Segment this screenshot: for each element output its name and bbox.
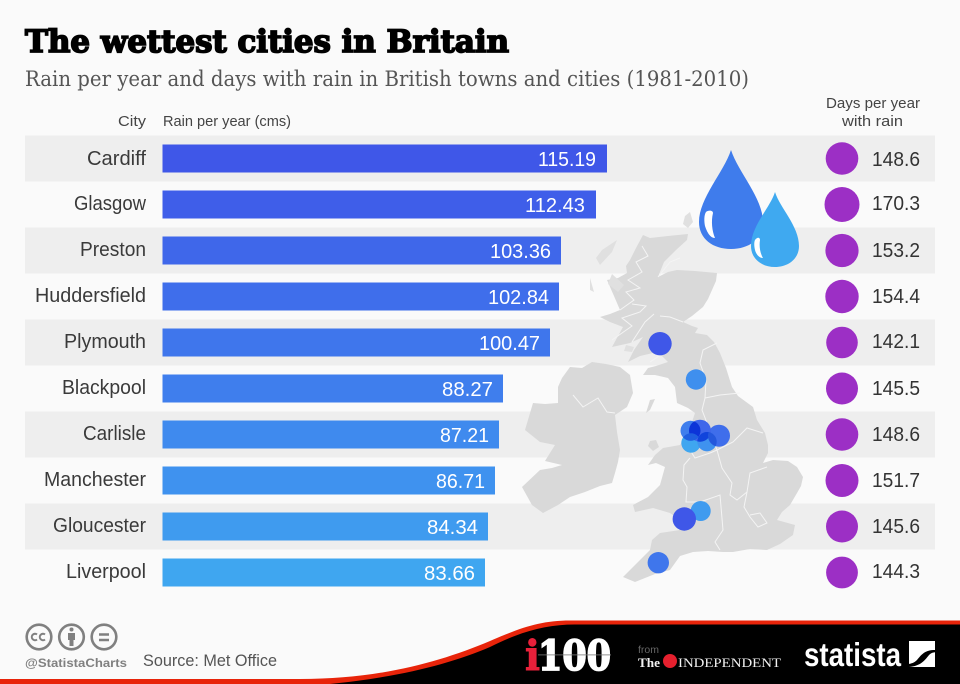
map: Anglesey [648, 440, 659, 451]
statista charts handle: @StatistaCharts [25, 656, 127, 670]
city labels [35, 148, 147, 583]
title: The wettest cities in Britain [25, 24, 509, 60]
city labels: Glasgow [74, 193, 147, 215]
bar: Preston [162, 236, 561, 264]
days values: 148.6 [872, 423, 920, 446]
city labels: Liverpool [66, 561, 146, 583]
bar: Manchester: 86.71 [436, 470, 485, 493]
days values: 153.2 [872, 239, 920, 262]
icon: large rain drop [699, 150, 763, 249]
column headers: Rain per year (cms) [163, 114, 291, 130]
days values: 145.6 [872, 515, 920, 538]
column headers [118, 96, 920, 130]
map city markers [648, 332, 730, 573]
bar: Cardiff: 115.19 [538, 148, 596, 171]
days values [872, 148, 920, 583]
subtitle: Rain per year and days with rain in British towns and cities (1981-2010) [25, 67, 749, 91]
bar: Plymouth: 100.47 [479, 332, 540, 355]
map: Ireland [522, 362, 633, 513]
logo: statista: statista [804, 636, 902, 673]
bar: Plymouth [162, 328, 550, 356]
bubble column: days per year with rain [824, 142, 860, 588]
days values: 170.3 [872, 192, 920, 215]
row bands [25, 136, 935, 550]
bar: Liverpool [162, 558, 485, 586]
bar: Gloucester: 84.34 [427, 516, 478, 539]
logo: from The Independent [638, 644, 781, 670]
city labels: Preston [80, 239, 146, 261]
days values: 154.4 [872, 285, 920, 308]
bar: Cardiff [162, 144, 607, 172]
logo: from The Independent: The [638, 655, 660, 670]
days values: 142.1 [872, 330, 920, 353]
icon: creative commons licence [27, 625, 116, 649]
days values: 151.7 [872, 469, 920, 492]
logo: i100: 100 [538, 632, 611, 680]
city labels: Blackpool [62, 377, 146, 399]
map of Britain and Ireland [522, 212, 803, 582]
footer band [0, 620, 960, 684]
column headers: with rain [841, 114, 903, 130]
source: Source: Met Office [143, 651, 277, 670]
bar: Blackpool: 88.27 [442, 378, 493, 401]
city labels: Huddersfield [35, 285, 146, 307]
bar: Huddersfield: 102.84 [488, 286, 549, 309]
map: Isle of Man [646, 399, 655, 413]
map: region borders [573, 246, 767, 550]
city labels: Carlisle [83, 423, 146, 445]
map: Scottish islands [590, 212, 693, 352]
bar chart: rain per year [162, 144, 607, 586]
logo: from The Independent: from [638, 644, 659, 656]
logo: i100: i [525, 632, 540, 680]
city labels: Cardiff [87, 148, 146, 170]
bar: Glasgow [162, 190, 596, 218]
bar: Carlisle: 87.21 [440, 424, 489, 447]
column headers: City [118, 114, 147, 130]
bar: Glasgow: 112.43 [525, 194, 585, 217]
bar: Huddersfield [162, 282, 559, 310]
icon: small rain drop [751, 192, 799, 267]
bar: Preston: 103.36 [490, 240, 551, 263]
bar: Liverpool: 83.66 [424, 562, 475, 585]
days values: 148.6 [872, 148, 920, 171]
bar: Gloucester [162, 512, 488, 540]
city labels: Gloucester [53, 515, 146, 537]
logo: from The Independent: INDEPENDENT [678, 655, 781, 670]
days values: 145.5 [872, 377, 920, 400]
city labels: Plymouth [64, 331, 146, 353]
map: Great Britain [600, 234, 803, 582]
days values: 144.3 [872, 560, 920, 583]
bar: Carlisle [162, 420, 499, 448]
column headers: Days per year [826, 96, 920, 112]
bar: Manchester [162, 466, 495, 494]
city labels: Manchester [44, 469, 146, 491]
bar: Blackpool [162, 374, 503, 402]
